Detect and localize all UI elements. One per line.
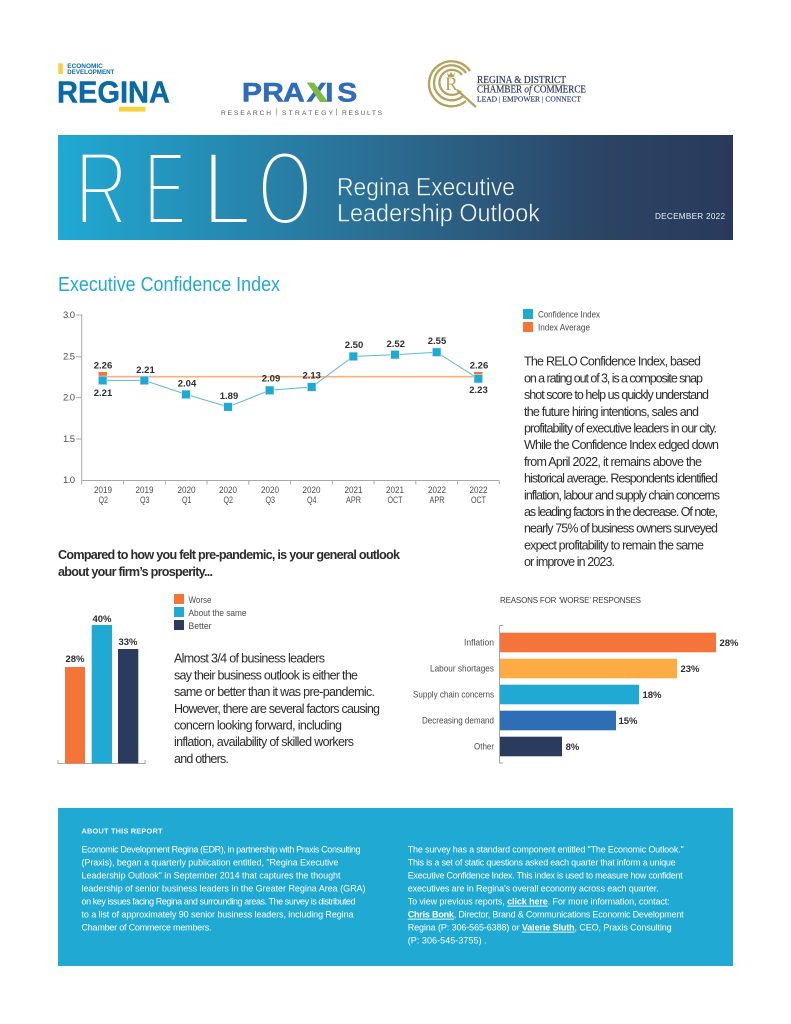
data labels: 1.89 bbox=[220, 391, 238, 402]
about heading: ABOUT THIS REPORT bbox=[82, 826, 163, 835]
text block: confidence index summary bbox=[524, 355, 720, 569]
banner subtitle: Leadership Outlook bbox=[337, 200, 540, 228]
x axis labels: 2019 bbox=[136, 485, 154, 496]
bar chart: reasons for worse responses: 18% bbox=[642, 690, 662, 701]
bar chart: reasons for worse responses bbox=[413, 596, 739, 763]
logo: Praxis: STRATEGY bbox=[282, 110, 334, 117]
text block: confidence index summary: While the Confidence Index edged down bbox=[524, 438, 719, 452]
x axis labels: 2019 bbox=[94, 485, 112, 496]
about text left column: leadership of senior business leaders in the Greater Regina Area (GRA) bbox=[82, 884, 366, 894]
data labels: 2.21 bbox=[94, 388, 113, 399]
logo: Praxis: RESEARCH bbox=[221, 110, 271, 117]
heading: pre-pandemic outlook question bbox=[58, 548, 401, 579]
x axis labels bbox=[94, 485, 488, 506]
outlook legend bbox=[174, 594, 246, 631]
x axis labels: Q3 bbox=[140, 495, 150, 506]
bar chart: reasons for worse responses: 28% bbox=[719, 638, 739, 649]
data labels: 2.52 bbox=[386, 339, 405, 350]
about text right column: Chris Bonk, Director, Brand & Communications Economic Development bbox=[408, 910, 684, 920]
text block: outlook summary: same or better than it was pre-pandemic. bbox=[174, 685, 375, 699]
y axis labels: 1.5 bbox=[63, 434, 75, 445]
about text left column: to a list of approximately 90 senior business leaders, including Regina bbox=[82, 909, 354, 919]
banner title: RELO: E bbox=[144, 131, 186, 248]
bar chart: outlook: 33% bbox=[118, 637, 138, 648]
data labels: 2.55 bbox=[428, 336, 447, 347]
about text right column: Executive Confidence Index. This index is used to measure how confident bbox=[408, 871, 683, 881]
about text right column: This is a set of static questions asked each quarter that inform a unique bbox=[408, 858, 676, 868]
text block: outlook summary: say their business outlook is either the bbox=[174, 668, 358, 682]
logo: Economic Development Regina bbox=[57, 63, 170, 112]
y axis labels: 3.0 bbox=[63, 310, 75, 321]
x axis labels: 2020 bbox=[261, 485, 279, 496]
y axis labels: 2.5 bbox=[63, 352, 75, 363]
banner title: RELO: O bbox=[258, 129, 312, 247]
x axis labels: Q4 bbox=[307, 495, 316, 506]
logo: Regina and District Chamber of Commerce bbox=[429, 61, 586, 107]
line chart: confidence index bbox=[63, 310, 499, 506]
text block: confidence index summary: profitability of executive leaders in our city. bbox=[524, 422, 717, 436]
text block: confidence index summary: or improve in 2023. bbox=[524, 555, 615, 569]
x axis labels: OCT bbox=[471, 495, 486, 506]
heading: Executive Confidence Index: Executive Confidence Index bbox=[58, 274, 280, 296]
x axis labels: OCT bbox=[388, 495, 403, 506]
text block: confidence index summary: nearly 75% of business owners surveyed bbox=[524, 522, 718, 536]
banner subtitle bbox=[337, 174, 540, 228]
logo: Economic Development Regina: REGINA bbox=[57, 74, 170, 110]
text block: outlook summary: concern looking forward, including bbox=[174, 718, 342, 732]
bar chart: outlook: 40% bbox=[92, 614, 112, 625]
heading: pre-pandemic outlook question: Compared to how you felt pre-pandemic, is your general outlook bbox=[58, 548, 401, 562]
y axis labels bbox=[63, 310, 75, 486]
banner date: DECEMBER 2022 bbox=[655, 212, 725, 221]
text block: outlook summary: and others. bbox=[174, 752, 229, 766]
x axis labels: 2022 bbox=[470, 485, 488, 496]
logo: Regina and District Chamber of Commerce: REGINA & DISTRICT bbox=[477, 75, 567, 86]
about text left column: Economic Development Regina (EDR), in partnership with Praxis Consulting bbox=[82, 845, 360, 855]
banner bbox=[58, 129, 733, 248]
logo: Regina and District Chamber of Commerce: LEAD | EMPOWER | CONNECT bbox=[477, 94, 581, 103]
data labels bbox=[94, 336, 488, 402]
data labels: 2.09 bbox=[262, 374, 280, 385]
data labels: 2.26 bbox=[470, 360, 488, 372]
about text right column: The survey has a standard component entitled "The Economic Outlook." bbox=[408, 845, 684, 855]
logo: Regina and District Chamber of Commerce: R bbox=[445, 74, 458, 95]
bar chart: reasons for worse responses: Labour shortages bbox=[430, 664, 494, 674]
text block: confidence index summary: expect profitability to remain the same bbox=[524, 538, 704, 552]
outlook legend: Worse bbox=[188, 595, 212, 605]
logo: Praxis: RESULTS bbox=[342, 110, 383, 117]
outlook legend: About the same bbox=[188, 608, 246, 618]
text block: confidence index summary: from April 2022, it remains above the bbox=[524, 455, 702, 469]
text block: confidence index summary: on a rating out of 3, is a composite snap bbox=[524, 371, 703, 385]
data labels: 2.26 bbox=[94, 360, 112, 372]
chart legend: Index Average bbox=[538, 322, 590, 332]
about text right column: (P: 306-545-3755) . bbox=[408, 936, 487, 946]
banner title: RELO bbox=[75, 129, 312, 248]
about text right column: Regina (P: 306-565-6388) or Valerie Sluth, CEO, Praxis Consulting bbox=[408, 923, 672, 933]
outlook legend: Better bbox=[188, 621, 212, 631]
x axis labels: Q1 bbox=[182, 495, 192, 506]
about text left column: (Praxis), began a quarterly publication entitled, "Regina Executive bbox=[82, 858, 338, 868]
text block: outlook summary: However, there are several factors causing bbox=[174, 702, 380, 716]
chart legend bbox=[523, 309, 600, 332]
x axis labels: 2020 bbox=[219, 485, 237, 496]
logo: Economic Development Regina: ECONOMIC bbox=[67, 64, 104, 70]
about text left column bbox=[82, 845, 366, 932]
data labels: 2.50 bbox=[345, 340, 363, 351]
text block: outlook summary: Almost 3/4 of business leaders bbox=[174, 652, 325, 666]
x axis labels: 2022 bbox=[428, 485, 446, 496]
y axis labels: 1.0 bbox=[63, 475, 75, 486]
banner subtitle: Regina Executive bbox=[337, 174, 515, 202]
y axis labels: 2.0 bbox=[63, 392, 75, 404]
x axis labels: APR bbox=[430, 495, 445, 506]
about text left column: on key issues facing Regina and surrounding areas. The survey is distributed bbox=[82, 896, 356, 906]
data labels: 2.13 bbox=[302, 371, 321, 382]
text block: confidence index summary: The RELO Confidence Index, based bbox=[524, 355, 701, 369]
x axis labels: 2021 bbox=[344, 485, 362, 496]
bar chart: reasons for worse responses: 8% bbox=[566, 742, 580, 753]
x axis labels: Q3 bbox=[266, 495, 275, 506]
data labels: 2.23 bbox=[469, 385, 488, 396]
logo: Praxis: PRAXIS bbox=[242, 78, 357, 108]
data labels: 2.21 bbox=[136, 365, 155, 376]
about text left column: Leadership Outlook" in September 2014 that captures the thought bbox=[82, 871, 341, 881]
text block: confidence index summary: shot score to help us quickly understand bbox=[524, 388, 709, 402]
about text right column bbox=[408, 845, 684, 946]
bar chart: reasons for worse responses: Other bbox=[474, 742, 494, 752]
x axis labels: 2021 bbox=[386, 485, 404, 496]
x axis labels: 2020 bbox=[302, 485, 320, 496]
chart legend: Confidence Index bbox=[538, 310, 600, 320]
text block: confidence index summary: the future hiring intentions, sales and bbox=[524, 405, 699, 419]
text block: confidence index summary: historical average. Respondents identified bbox=[524, 472, 718, 486]
x axis labels: Q2 bbox=[98, 495, 108, 506]
data labels: 2.04 bbox=[178, 379, 197, 390]
text block: outlook summary: inflation, availability of skilled workers bbox=[174, 735, 354, 749]
bar chart: reasons for worse responses: 15% bbox=[618, 716, 638, 727]
banner title: RELO: L bbox=[202, 130, 252, 247]
panel: about this report bbox=[58, 808, 733, 966]
heading: pre-pandemic outlook question: about your firm’s prosperity... bbox=[58, 565, 213, 579]
banner title: RELO: R bbox=[75, 131, 128, 248]
text block: confidence index summary: as leading factors in the decrease. Of note, bbox=[524, 505, 718, 519]
bar chart: reasons for worse responses: Inflation bbox=[464, 638, 494, 648]
logo: Praxis bbox=[221, 78, 383, 117]
chart title: REASONS FOR ‘WORSE’ RESPONSES bbox=[500, 596, 641, 605]
x axis labels: Q2 bbox=[224, 495, 233, 506]
logo: Economic Development Regina: DEVELOPMENT bbox=[67, 70, 115, 76]
confidence index series bbox=[98, 348, 483, 411]
text block: confidence index summary: inflation, labour and supply chain concerns bbox=[524, 488, 720, 502]
logo: Regina and District Chamber of Commerce: CHAMBER of COMMERCE bbox=[477, 84, 586, 96]
bar chart: outlook bbox=[58, 614, 145, 764]
bar chart: outlook: 28% bbox=[65, 654, 85, 665]
x axis labels: APR bbox=[346, 495, 361, 506]
bar chart: reasons for worse responses: 23% bbox=[680, 664, 700, 675]
about text right column: executives are in Regina's overall economy across each quarter. bbox=[408, 884, 659, 894]
index average series bbox=[98, 372, 482, 380]
text block: outlook summary bbox=[174, 652, 380, 766]
about text left column: Chamber of Commerce members. bbox=[82, 922, 212, 932]
x axis labels: 2020 bbox=[178, 485, 196, 496]
about text right column: To view previous reports, click here. For more information, contact: bbox=[408, 897, 670, 907]
bar chart: reasons for worse responses: Supply chain concerns bbox=[413, 690, 494, 700]
bar chart: reasons for worse responses: Decreasing demand bbox=[422, 716, 494, 726]
